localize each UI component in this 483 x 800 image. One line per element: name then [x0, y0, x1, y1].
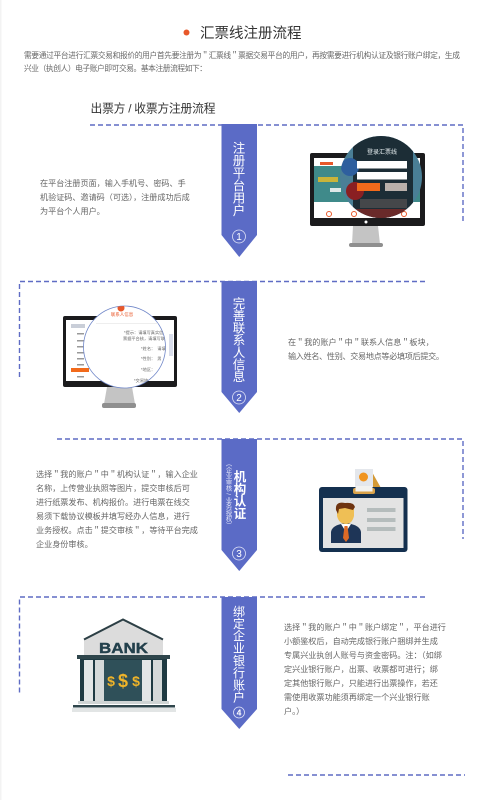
icon: bank: $	[107, 673, 115, 689]
icon: bank: BANK	[99, 640, 148, 657]
icon: id badge	[319, 469, 408, 552]
icon: bank	[72, 620, 176, 712]
step 1 text	[40, 178, 190, 216]
icon: bank: $	[132, 673, 140, 689]
step 2 text: 在＂我的账户＂中＂联系人信息＂板块，	[288, 337, 434, 347]
monitor with contact form: *姓名： 请填	[141, 345, 166, 352]
ribbon step 1: 户	[233, 203, 245, 218]
monitor with login screen	[310, 135, 425, 247]
ribbon step 4: 户	[233, 690, 245, 704]
ribbon step 3: 机	[234, 469, 247, 484]
ribbon step 2: 信	[233, 358, 245, 372]
ribbon step 2: 2	[236, 393, 242, 404]
ribbon step 3: （企业审核 / 业务授权）	[224, 460, 232, 528]
ribbon step 1: 1	[236, 232, 242, 243]
step 1 text: 在平台注册页面，输入手机号、密码、手	[40, 178, 186, 188]
step 4 text	[284, 622, 446, 716]
step 3 text: 选择＂我的账户＂中＂机构认证＂，输入企业	[36, 469, 198, 479]
ribbon step 4	[222, 597, 257, 729]
ribbon step 3: 认	[234, 494, 247, 509]
ribbon step 1: 平	[233, 166, 245, 180]
ribbon step 4: 绑	[233, 605, 245, 619]
monitor with contact form: 票据平台核，请填写联系信息	[123, 335, 177, 342]
ribbon step 1: 注	[233, 140, 246, 156]
step 4 text: 小额鉴权后，自动完成银行账户捆绑并生成	[284, 636, 438, 646]
ribbon step 3: 3	[236, 549, 242, 560]
ribbon step 4: 定	[233, 616, 245, 631]
step 4 text: 选择＂我的账户＂中＂账户绑定＂，平台进行	[284, 622, 446, 632]
monitor with contact form: *交易地点	[134, 377, 152, 384]
monitor with contact form: *地区：	[141, 366, 155, 372]
intro text: 兴业（执创人）电子账户即可交易。基本注册流程如下：	[24, 63, 207, 73]
step 3 text: 业务授权。点击＂提交审核＂，等待平台完成	[36, 525, 198, 535]
ribbon step 3: 构	[234, 481, 246, 496]
title: 汇票线注册流程	[200, 25, 302, 42]
ribbon step 2: 系	[233, 334, 245, 348]
ribbon step 4: 业	[233, 642, 245, 656]
ribbon step 2: 息	[233, 369, 245, 384]
step 1 text: 为平台个人用户。	[40, 206, 105, 216]
ribbon step 4: 行	[233, 666, 245, 680]
step 3 text: 名称，上传营业执照等图片，提交审核后可	[36, 483, 190, 493]
monitor with contact form: *提示：请填写真实信息以	[124, 329, 173, 336]
monitor with contact form: 联系人信息	[111, 311, 134, 318]
ribbon step 3: 证	[234, 507, 247, 521]
ribbon step 2	[222, 281, 257, 413]
icon: bank: $	[118, 671, 128, 691]
intro text	[24, 50, 460, 73]
step 4 text: 专属兴业执创人账号与资金密码。注：（如绑	[284, 650, 442, 660]
ribbon step 4: 账	[233, 678, 245, 692]
ribbon step 4: 企	[233, 628, 245, 643]
step 4 text: 户。）	[284, 706, 304, 716]
step 4 text: 定兴业银行账户，出票、收票都可进行；绑	[284, 664, 438, 674]
ribbon step 3	[222, 439, 257, 571]
ribbon step 1: 台	[233, 178, 245, 193]
ribbon step 1: 册	[233, 154, 245, 168]
ribbon step 2: 完	[233, 296, 245, 311]
monitor with contact form: *性别： 男	[141, 355, 161, 362]
ribbon step 1	[222, 124, 257, 257]
step 3 text	[36, 469, 198, 549]
ribbon step 2: 人	[233, 346, 246, 360]
monitor with contact form	[63, 304, 177, 408]
intro text: 需要通过平台进行汇票交易和报价的用户首先要注册为＂汇票线＂票据交易平台的用户，再按需要进行机构认证及银行账户绑定，生成	[24, 50, 460, 60]
step 1 text: 机验证码、邀请码（可选），注册成功后成	[40, 192, 190, 202]
step 4 text: 需使用收票功能须再绑定一个兴业银行账	[284, 692, 430, 702]
ribbon step 1: 用	[233, 192, 245, 206]
step 3 text: 企业身份审核。	[36, 539, 93, 549]
ribbon step 4: 银	[233, 654, 245, 668]
step 2 text	[288, 337, 444, 361]
ribbon step 4: 4	[237, 708, 242, 718]
monitor with login screen: 登录汇票线	[367, 148, 397, 156]
step 3 text: 易须下载协议模板并填写经办人信息，进行	[36, 511, 190, 521]
step 3 text: 进行纸票发布、机构报价。进行电票在线交	[36, 497, 190, 507]
step 4 text: 定其他银行账户，只能进行出票操作，若还	[284, 678, 438, 688]
ribbon step 2: 善	[233, 308, 245, 323]
subheading: 出票方 / 收票方注册流程	[90, 102, 216, 116]
ribbon step 2: 联	[233, 321, 246, 335]
step 2 text: 输入姓名、性别、交易地点等必填项后提交。	[288, 351, 444, 361]
